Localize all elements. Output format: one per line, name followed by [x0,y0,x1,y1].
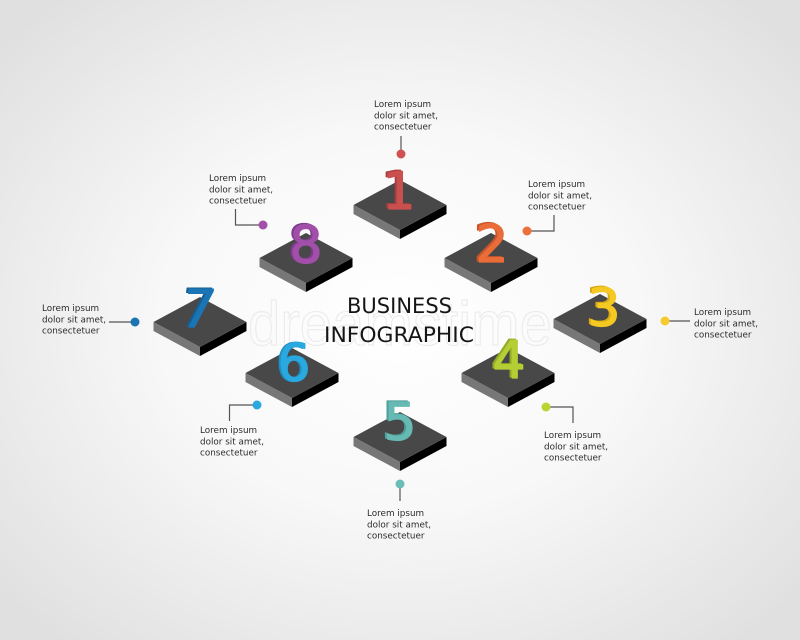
step 6 [200,334,338,459]
platform 6 [246,348,338,407]
connector 1 [400,136,402,154]
text 7: dolor sit amet, [42,315,106,325]
number 2: 2 [475,215,509,275]
text 4: consectetuer [544,454,602,464]
step 7 [42,279,246,356]
step 2 [444,180,592,292]
platform 2 [444,233,538,292]
text 8: dolor sit amet, [209,185,273,195]
text 3: consectetuer [694,331,752,341]
connector 6 [230,405,257,421]
number 6: 6 [277,334,311,394]
text 7: Lorem ipsum [42,304,99,314]
text 6: dolor sit amet, [200,437,264,447]
text 5: dolor sit amet, [367,520,431,530]
platform 1 [354,180,446,239]
dot 6 [252,400,262,410]
title: INFOGRAPHIC [324,323,474,347]
platform 4 [462,348,554,407]
text 1: dolor sit amet, [374,111,438,121]
platform 3 [554,294,646,353]
text 3: dolor sit amet, [694,319,758,329]
text 3: Lorem ipsum [694,308,751,318]
text 2: consectetuer [528,203,586,213]
connector 4 [546,407,573,423]
text 5: Lorem ipsum [367,509,424,519]
step 8 [209,174,352,292]
title [324,294,474,347]
step 3 [554,278,758,353]
number 7: 7 [178,280,219,340]
number 7: 7 [176,279,217,339]
connector 5 [399,484,401,501]
connector 7 [109,321,135,323]
number 8: 8 [287,215,321,275]
platform 8 [260,233,352,292]
step 5 [354,392,446,542]
dot 4 [542,402,550,412]
number 5: 5 [383,393,417,453]
text 5: consectetuer [367,532,425,542]
connector 2 [527,215,554,231]
number 1: 1 [382,162,416,222]
text 6: consectetuer [200,449,258,459]
text 2: Lorem ipsum [528,180,585,190]
text 8: consectetuer [209,197,267,207]
text 1: Lorem ipsum [374,100,431,110]
platform 7 [154,297,246,356]
number 5: 5 [381,392,415,452]
number 1: 1 [380,161,414,221]
watermark: dreamstime [248,290,552,359]
text 4: dolor sit amet, [544,442,608,452]
text 1: consectetuer [374,123,432,133]
dot 2 [522,226,532,236]
text 2: dolor sit amet, [528,191,592,201]
text 4: Lorem ipsum [544,431,601,441]
number 6: 6 [275,334,309,394]
step 4 [462,330,608,464]
step 1 [354,100,446,239]
text 7: consectetuer [42,327,100,337]
dot 5 [396,480,404,488]
dot 3 [660,316,670,326]
dot 8 [258,220,268,230]
number 4: 4 [490,330,524,390]
dot 7 [130,318,140,326]
connector 3 [665,320,690,322]
number 3: 3 [587,279,621,339]
title: BUSINESS [347,294,452,318]
connector 8 [236,209,263,225]
number 3: 3 [585,278,619,338]
dot 1 [396,150,406,158]
text 8: Lorem ipsum [209,174,266,184]
platform 5 [354,412,446,471]
number 4: 4 [492,331,526,391]
text 6: Lorem ipsum [200,426,257,436]
number 2: 2 [473,214,507,274]
number 8: 8 [289,216,323,276]
